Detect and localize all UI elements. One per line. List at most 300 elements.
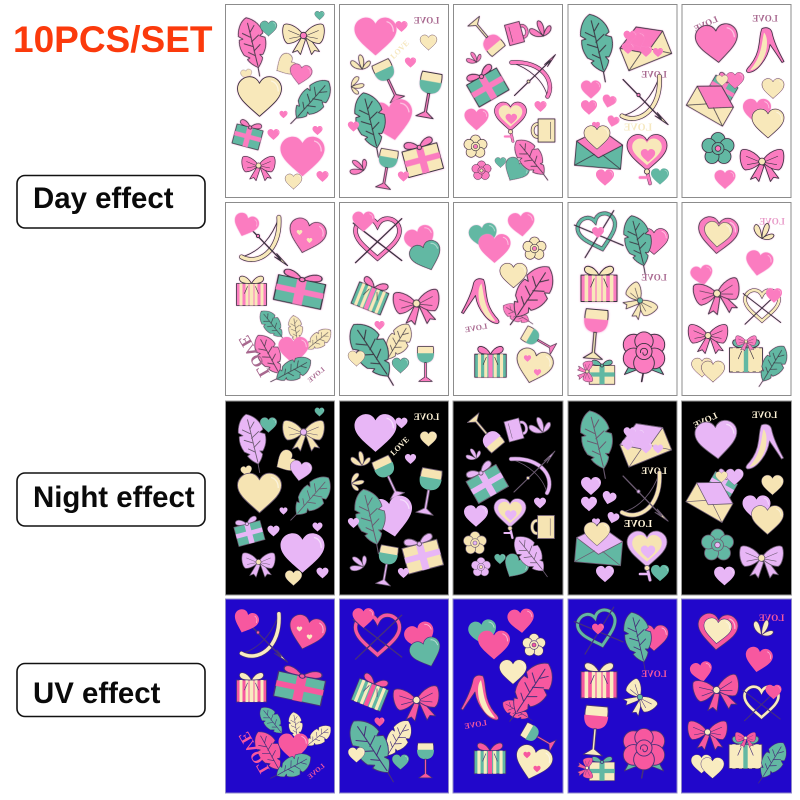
icon: heart <box>702 617 733 645</box>
icon: card <box>707 70 741 104</box>
icon: heart <box>240 465 253 477</box>
icon: wine glass <box>374 148 399 190</box>
text: love: LOVE <box>464 322 488 334</box>
icon: heart <box>762 475 784 495</box>
icon: heart <box>420 431 437 447</box>
icon: butterfly <box>527 413 553 439</box>
icon: butterfly <box>754 620 774 636</box>
panel: night sheet 1 <box>226 401 338 595</box>
icon: flower <box>464 135 487 157</box>
icon: feather <box>575 407 622 482</box>
icon: heart <box>726 72 744 89</box>
icon: rose <box>623 728 665 778</box>
icon: mug <box>533 119 555 142</box>
icon: feather <box>349 485 395 557</box>
title: 10PCS/SET <box>13 19 213 60</box>
icon: bow <box>688 325 728 354</box>
panel: day sheet 6 <box>226 202 335 396</box>
icon: heart <box>352 212 374 231</box>
icon: heart <box>601 94 617 109</box>
icon: heart <box>288 63 313 86</box>
panel: day sheet 1 <box>226 4 338 198</box>
icon: heart <box>606 115 620 128</box>
label: day effect: Day effect <box>33 182 174 215</box>
icon: bow <box>242 553 275 577</box>
icon: feather <box>282 470 338 529</box>
icon: heart <box>499 660 527 684</box>
icon: gift <box>351 671 392 712</box>
icon: heart <box>701 758 724 778</box>
icon: heart <box>392 358 409 373</box>
panel: day sheet 7 <box>340 202 448 396</box>
icon: heart <box>653 48 663 57</box>
icon: feather <box>500 299 537 330</box>
icon: heart <box>405 454 416 464</box>
icon: butterfly <box>348 552 368 574</box>
icon: heart <box>691 755 712 773</box>
text: love: LOVE <box>641 669 667 679</box>
icon: heart <box>260 417 277 433</box>
icon: flower <box>702 132 734 164</box>
text: love: LOVE <box>464 718 488 731</box>
icon: heart <box>628 427 648 447</box>
icon: gift <box>273 267 327 309</box>
icon: heart <box>398 171 409 182</box>
icon: heart <box>622 440 634 450</box>
icon: framed heart <box>697 216 739 255</box>
icon: small hearts <box>534 369 541 376</box>
icon: heart key <box>627 134 667 184</box>
icon: gift <box>581 266 617 302</box>
icon: mug <box>504 417 529 442</box>
icon: heart <box>584 126 610 149</box>
panel: day sheet 4 <box>568 4 677 198</box>
icon: wine glass <box>414 467 443 516</box>
text: love: LOVE <box>235 729 272 777</box>
icon: flower <box>471 557 491 576</box>
icon: wine glass <box>414 71 443 119</box>
icon: feather <box>751 738 792 789</box>
icon: bow and arrow <box>512 54 556 96</box>
icon: heart <box>402 223 439 258</box>
icon: envelope <box>615 415 672 467</box>
icon: heart <box>316 171 328 182</box>
icon: heart <box>511 346 556 387</box>
icon: feather <box>499 259 562 334</box>
panel: night sheet 5 <box>682 401 792 595</box>
icon: gift <box>474 743 506 774</box>
icon: heart <box>467 618 499 648</box>
icon: heart <box>280 507 288 515</box>
icon: heart <box>468 222 499 251</box>
icon: envelope <box>686 472 739 523</box>
icon: high heel <box>461 675 498 720</box>
icon: heart <box>596 566 614 582</box>
icon: envelope <box>575 524 624 566</box>
icon: small hearts <box>524 355 531 362</box>
icon: feather <box>508 133 558 186</box>
icon: feather <box>286 314 306 348</box>
icon: heart <box>511 742 555 784</box>
icon: heart <box>478 631 510 659</box>
panel: night sheet 3 <box>453 401 563 595</box>
icon: heart <box>581 100 597 115</box>
icon: heart ring with arrows <box>353 615 402 659</box>
icon: heart <box>238 473 282 513</box>
icon: heart <box>398 568 409 578</box>
icon: heart <box>366 494 417 540</box>
icon: heart <box>689 264 715 287</box>
icon: heart <box>592 122 600 129</box>
icon: heart <box>348 351 365 366</box>
icon: envelope <box>575 128 624 169</box>
icon: wine glass <box>581 309 609 360</box>
icon: heart <box>392 754 409 770</box>
icon: heart ring with arrows <box>743 290 781 324</box>
icon: bow <box>283 420 324 451</box>
icon: heart <box>407 634 446 672</box>
icon: heart key <box>494 499 526 538</box>
text: love: LOVE <box>641 272 667 282</box>
icon: heart <box>315 408 324 416</box>
icon: gift <box>463 61 509 107</box>
icon: heart <box>271 448 300 476</box>
label: night effect: Night effect <box>33 481 195 514</box>
icon: butterfly <box>347 472 367 492</box>
icon: feather <box>340 712 408 790</box>
icon: heart <box>762 79 784 98</box>
icon: heart <box>284 612 329 654</box>
icon: heart <box>278 734 308 760</box>
icon: heart <box>354 414 396 452</box>
icon: feather <box>266 748 316 788</box>
icon: heart <box>581 477 601 495</box>
icon: feather <box>248 726 293 781</box>
text: love: LOVE <box>389 435 411 457</box>
icon: heart <box>628 31 648 50</box>
icon: bow and arrow <box>622 473 668 521</box>
icon: heart <box>534 498 546 508</box>
icon: bow <box>736 336 756 351</box>
text: love: LOVE <box>641 70 667 80</box>
text: love: LOVE <box>692 14 719 34</box>
icon: bow <box>692 674 743 715</box>
icon: butterfly <box>348 156 368 177</box>
icon: butterfly <box>754 223 774 240</box>
icon: butterfly <box>349 449 372 470</box>
icon: small hearts <box>297 230 302 235</box>
icon: heart <box>584 522 610 546</box>
icon: bow <box>616 677 659 721</box>
label: night effect <box>17 473 205 526</box>
icon: heart <box>715 170 735 189</box>
icon: heart <box>752 506 784 534</box>
icon: card <box>706 467 740 500</box>
label: UV effect <box>17 664 205 716</box>
icon: heart <box>495 157 506 168</box>
icon: heart <box>651 168 669 185</box>
icon: gift <box>475 346 506 377</box>
icon: heart <box>396 21 408 32</box>
icon: heart <box>653 444 663 454</box>
label: day effect <box>17 176 205 228</box>
icon: feather <box>255 306 292 346</box>
icon: butterfly <box>465 49 483 67</box>
icon: heart <box>499 155 532 186</box>
icon: feather <box>286 711 306 744</box>
icon: flower <box>463 531 487 554</box>
panel: uv sheet 4 <box>568 599 677 793</box>
icon: small hearts <box>297 626 302 632</box>
icon: bow <box>616 281 659 324</box>
icon: wine glass <box>417 346 434 381</box>
icon: heart <box>703 221 733 248</box>
text: love: LOVE <box>306 762 326 781</box>
icon: feather <box>349 89 395 161</box>
icon: heart <box>640 443 652 453</box>
icon: feather <box>299 721 335 755</box>
icon: heart <box>651 565 669 581</box>
icon: heart <box>592 227 604 238</box>
icon: heart <box>640 625 668 651</box>
icon: heart <box>507 608 535 634</box>
icon: heart <box>766 685 782 699</box>
icon: gift <box>729 736 762 768</box>
icon: small hearts <box>307 634 312 640</box>
icon: heart <box>606 511 620 525</box>
icon: heart <box>507 212 536 237</box>
icon: heart <box>694 23 740 64</box>
icon: heart <box>692 358 712 377</box>
icon: heart <box>352 608 374 628</box>
icon: bow and arrow <box>242 217 288 266</box>
icon: feather <box>751 341 793 393</box>
icon: heart <box>726 469 744 485</box>
icon: heart <box>312 126 322 135</box>
panel: uv sheet 1 <box>226 599 335 793</box>
icon: heart <box>285 174 302 189</box>
icon: heart <box>716 75 728 86</box>
text: love: LOVE <box>624 519 652 530</box>
icon: heart <box>694 419 739 461</box>
icon: heart <box>405 57 416 68</box>
icon: feather <box>619 212 660 277</box>
icon: high heel <box>747 28 784 72</box>
icon: mug <box>504 20 529 46</box>
panel: uv sheet 2 <box>340 599 448 793</box>
icon: heart <box>752 109 784 138</box>
icon: gift <box>581 663 617 698</box>
icon: heart <box>348 518 359 528</box>
icon: gift <box>400 135 444 178</box>
icon: bow <box>393 685 441 723</box>
icon: heart <box>596 169 614 186</box>
icon: feather <box>282 73 338 133</box>
icon: mug <box>532 515 554 539</box>
icon: heart <box>743 99 771 124</box>
icon: gift <box>232 118 265 150</box>
icon: envelope <box>686 76 740 126</box>
icon: gift <box>730 340 762 372</box>
text: love: LOVE <box>759 613 784 623</box>
icon: butterfly <box>528 17 553 42</box>
icon: gift <box>236 276 266 306</box>
icon: bow and arrow <box>242 614 288 662</box>
icon: wine glass <box>371 455 406 500</box>
icon: heart <box>374 321 384 330</box>
icon: bow <box>740 546 783 578</box>
text: love: LOVE <box>414 16 439 26</box>
text: love: LOVE <box>692 410 719 430</box>
icon: gift <box>400 532 444 574</box>
icon: heart <box>581 497 597 511</box>
icon: heart <box>288 459 313 483</box>
panel: day sheet 8 <box>454 202 562 396</box>
icon: bow <box>740 149 784 181</box>
icon: bow and arrow <box>511 451 555 493</box>
icon: gift <box>351 275 392 315</box>
icon: heart <box>464 109 488 130</box>
text: love: LOVE <box>759 216 785 226</box>
icon: heart <box>354 18 396 55</box>
icon: heart <box>396 418 408 428</box>
icon: wine glass <box>581 705 609 756</box>
icon: heart <box>640 46 652 57</box>
icon: heart key <box>494 102 526 141</box>
icon: heart <box>624 427 636 439</box>
icon: feather <box>499 655 561 731</box>
icon: gift <box>589 757 615 781</box>
panel: day sheet 5 <box>682 4 791 198</box>
panel: night sheet 4 <box>568 401 677 595</box>
icon: bow <box>393 289 441 326</box>
icon: heart ring with arrows <box>353 219 402 263</box>
icon: feather <box>248 330 293 385</box>
icon: wine glass <box>417 743 434 778</box>
icon: heart <box>312 522 322 532</box>
icon: heart <box>494 554 506 564</box>
panel: day sheet 10 <box>682 202 793 396</box>
icon: heart ring key <box>573 211 624 258</box>
icon: bow <box>735 732 756 748</box>
icon: heart <box>316 568 328 578</box>
icon: flower <box>702 529 734 560</box>
icon: heart <box>701 361 725 382</box>
icon: heart <box>240 69 253 80</box>
icon: butterfly <box>465 445 482 463</box>
icon: heart <box>348 121 359 132</box>
icon: feather <box>575 10 622 85</box>
panel: day sheet 2 <box>340 4 448 198</box>
icon: heart <box>402 619 439 655</box>
icon: small hearts <box>307 238 312 243</box>
icon: heart ring with arrows <box>743 687 780 721</box>
label: UV effect: UV effect <box>33 677 161 710</box>
icon: gift <box>236 673 266 702</box>
icon: heart <box>280 111 288 118</box>
icon: feather <box>508 530 557 583</box>
icon: wine glass <box>520 325 558 356</box>
icon: heart <box>534 101 546 112</box>
icon: heart <box>230 607 261 637</box>
icon: gift <box>273 664 327 706</box>
panel: uv sheet 3 <box>453 599 563 793</box>
text: love: LOVE <box>389 39 411 61</box>
icon: bow <box>692 277 743 318</box>
icon: small hearts <box>523 752 531 758</box>
icon: heart <box>366 97 417 144</box>
icon: heart <box>601 490 617 506</box>
icon: heart <box>743 646 774 674</box>
icon: heart <box>716 472 728 482</box>
icon: heart <box>407 238 446 275</box>
icon: high heel <box>746 424 784 469</box>
icon: heart <box>238 77 282 116</box>
text: love: LOVE <box>641 466 667 476</box>
icon: heart <box>766 288 782 303</box>
icon: small hearts <box>533 766 541 772</box>
icon: heart <box>714 567 735 585</box>
icon: heart <box>478 234 510 263</box>
icon: heart key <box>627 531 667 580</box>
icon: bow <box>578 361 593 382</box>
icon: feather <box>619 609 660 674</box>
icon: heart <box>581 80 601 98</box>
icon: feather <box>376 319 417 371</box>
icon: heart <box>278 337 308 364</box>
icon: gift <box>589 360 615 384</box>
icon: heart <box>271 51 300 80</box>
icon: heart <box>230 211 261 240</box>
icon: wine glass <box>466 15 506 57</box>
icon: bow <box>283 24 324 54</box>
icon: feather <box>340 315 408 393</box>
icon: heart <box>500 263 527 288</box>
icon: feather <box>499 696 537 726</box>
icon: heart <box>499 551 531 583</box>
icon: heart <box>268 129 280 140</box>
text: love: LOVE <box>414 412 439 422</box>
icon: heart <box>280 533 324 573</box>
icon: wine glass <box>374 545 399 586</box>
icon: flower <box>472 161 491 180</box>
icon: heart <box>315 11 324 20</box>
icon: bow and arrow <box>622 76 668 125</box>
icon: heart <box>640 229 668 254</box>
icon: bow <box>688 721 727 750</box>
icon: heart <box>374 718 384 726</box>
icon: butterfly <box>349 52 372 74</box>
icon: flower <box>522 633 546 656</box>
panel: day sheet 3 <box>454 4 562 198</box>
icon: bow <box>242 156 275 181</box>
icon: heart <box>260 21 277 36</box>
icon: wine glass <box>466 412 505 454</box>
icon: feather <box>233 14 274 79</box>
icon: gift <box>232 515 265 547</box>
icon: heart <box>742 495 770 521</box>
text: love: LOVE <box>306 366 326 385</box>
icon: heart <box>592 624 604 634</box>
icon: rose <box>623 332 665 381</box>
icon: heart <box>280 137 324 176</box>
icon: heart <box>268 526 280 536</box>
panel: night sheet 2 <box>340 401 448 595</box>
icon: gift <box>462 458 509 504</box>
icon: heart <box>624 31 636 42</box>
icon: heart <box>464 505 488 527</box>
icon: feather <box>299 324 335 358</box>
